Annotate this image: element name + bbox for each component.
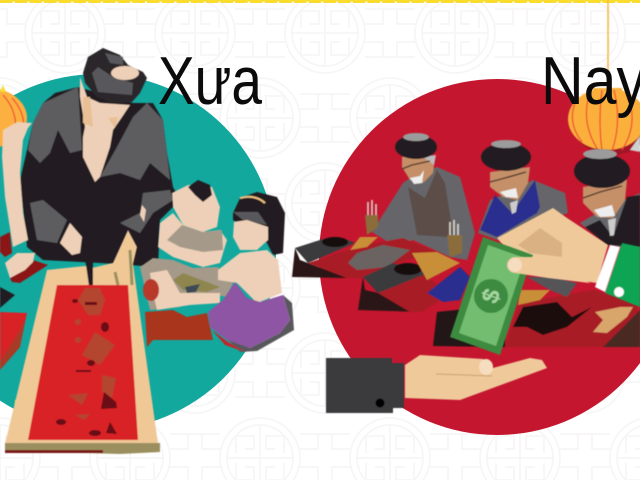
robe highlights xyxy=(28,87,173,243)
scribes writing at tables xyxy=(292,133,640,347)
teal circle xyxy=(0,74,276,430)
dark sleeve xyxy=(326,358,404,413)
illustration: girl with purple skirt xyxy=(208,192,294,352)
scribe 2 xyxy=(478,140,568,240)
dark red cloth xyxy=(0,232,48,283)
heading: Xưa: Xưa xyxy=(158,43,262,119)
illustration: old calligrapher xyxy=(0,48,180,283)
table 3 xyxy=(433,277,640,347)
arm and hands xyxy=(2,122,32,247)
left lantern xyxy=(0,85,27,420)
green sleeve xyxy=(605,243,640,307)
table 2 xyxy=(358,252,470,312)
table 1 xyxy=(292,237,437,278)
brush holders xyxy=(365,200,462,257)
scribe 3 xyxy=(574,149,640,250)
banknote xyxy=(450,237,533,355)
hat xyxy=(83,48,147,103)
illustration: child xyxy=(140,180,233,347)
face and beard xyxy=(80,77,130,182)
body xyxy=(20,87,180,267)
scribe 1 xyxy=(372,133,475,260)
left edge dark and red shapes xyxy=(0,287,27,370)
palm xyxy=(405,355,547,400)
right lantern with string xyxy=(568,0,640,155)
banknote: $ xyxy=(476,285,507,307)
white cuff xyxy=(595,245,620,292)
upper hand giving money xyxy=(497,208,640,307)
upper finger over banknote xyxy=(507,257,590,283)
top yellow scalloped border xyxy=(0,0,640,2)
scroll with calligraphy xyxy=(5,230,160,454)
red circle xyxy=(319,79,640,435)
lower hand receiving money xyxy=(326,355,547,413)
